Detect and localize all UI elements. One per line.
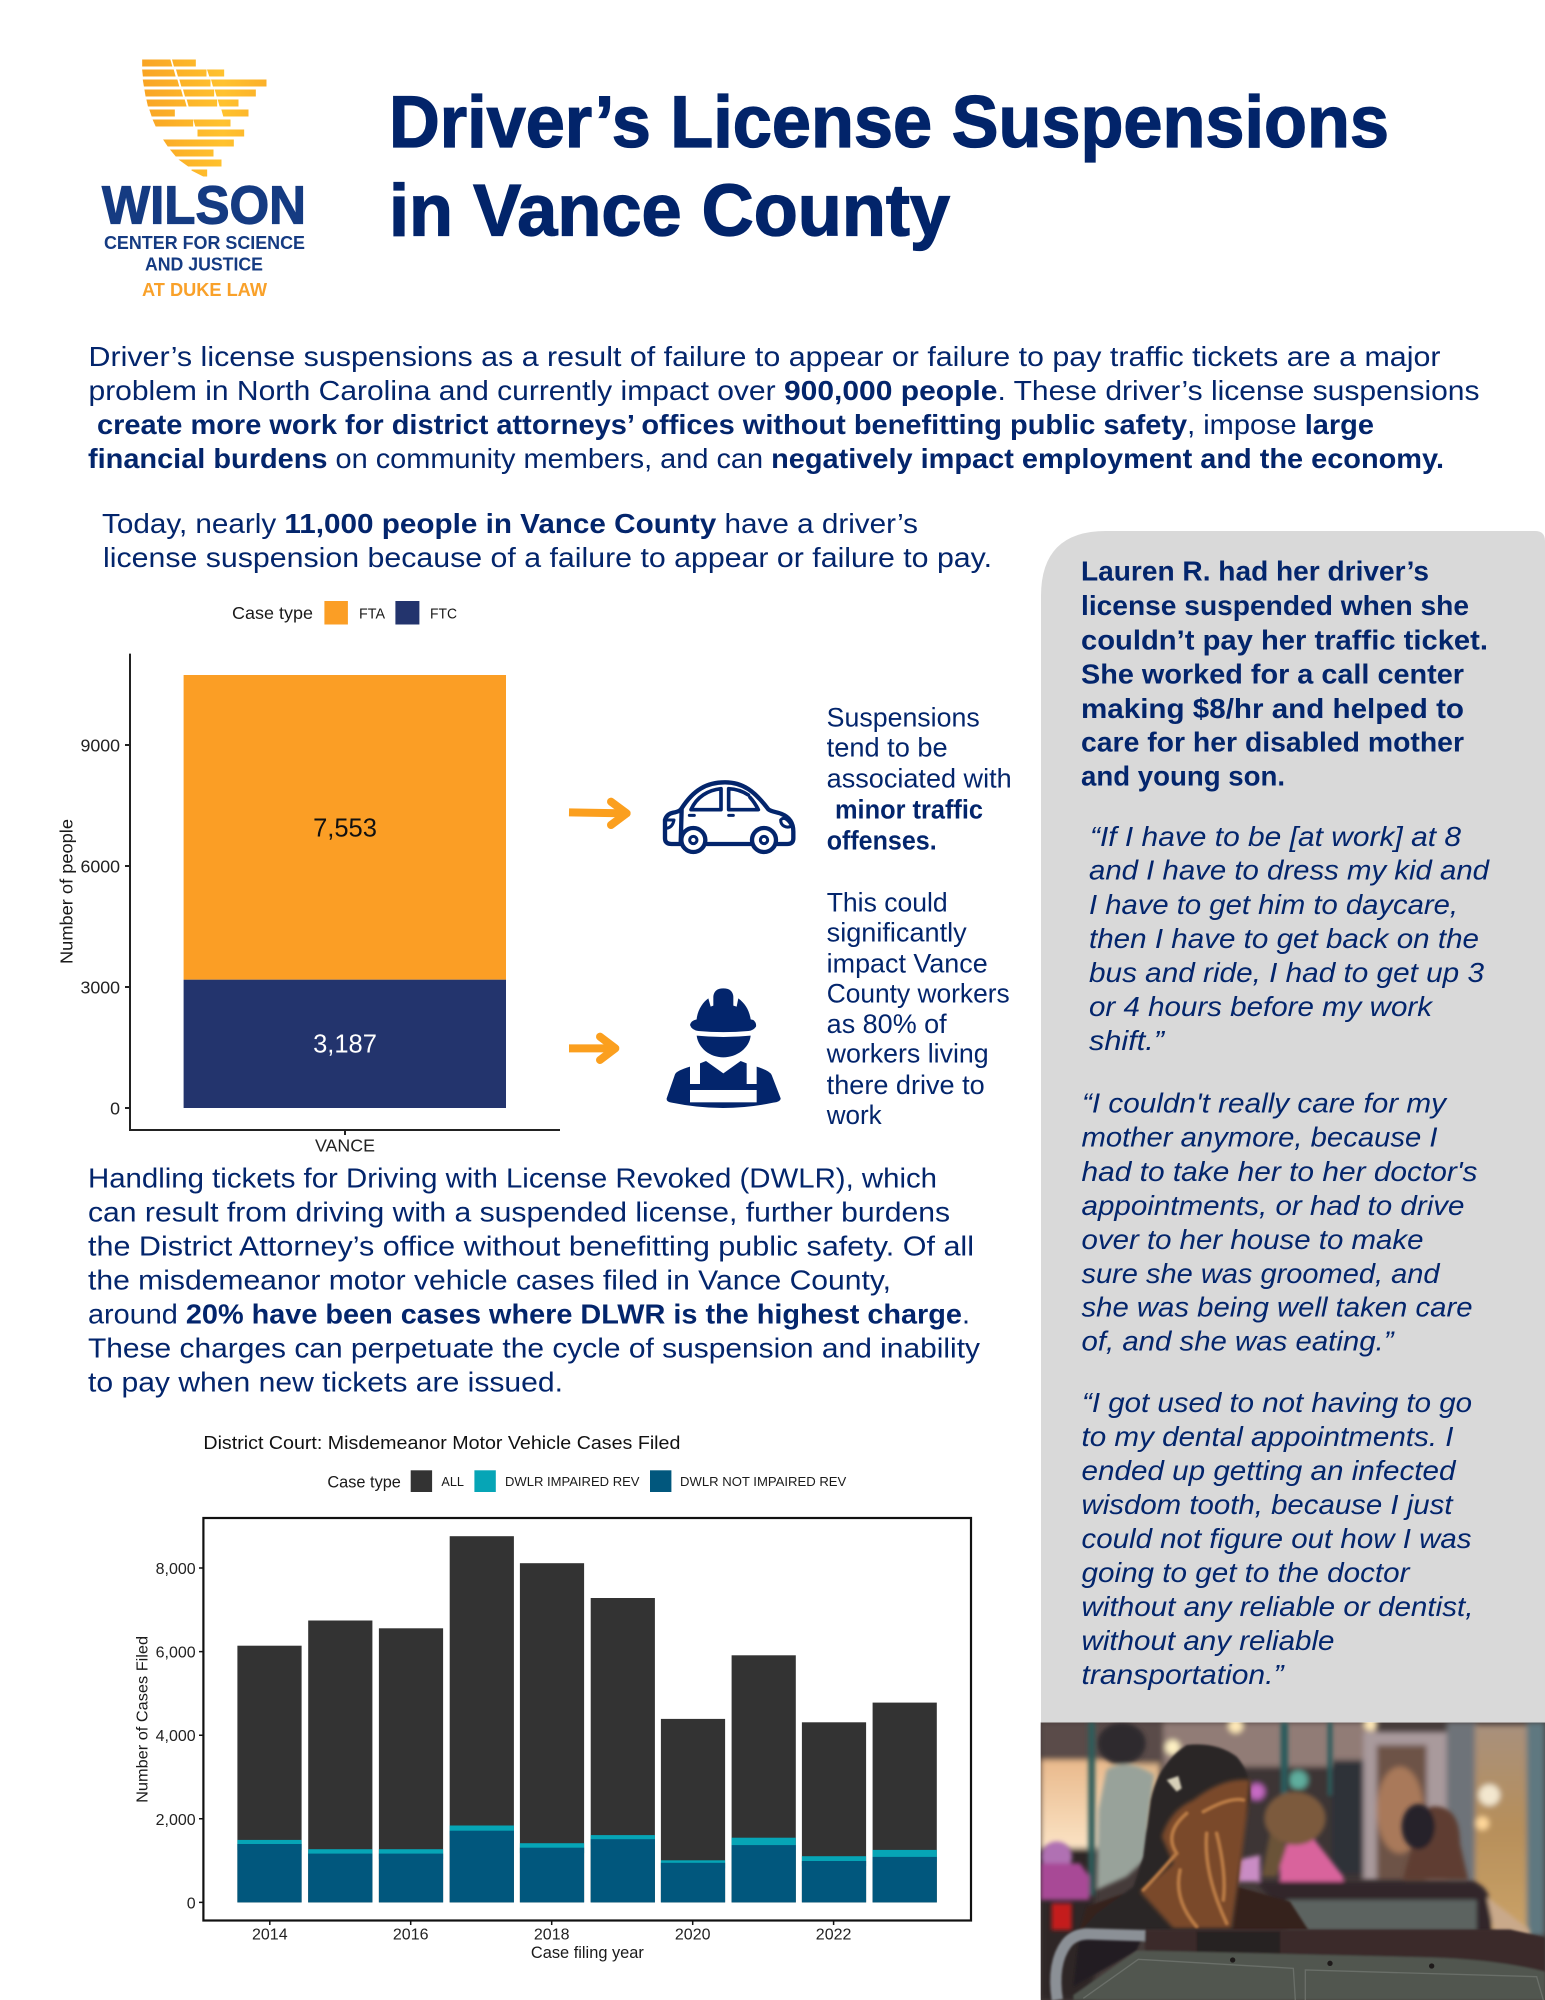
text block: Lauren R. summary: making $8/hr and helped to (1081, 693, 1464, 724)
text block: Lauren R. summary: license suspended when she (1081, 590, 1469, 621)
quote: dental appointments: wisdom tooth, because I just (1082, 1489, 1454, 1520)
text block: Lauren R. summary (1081, 556, 1488, 792)
y axis tick labels: 2,000 (156, 1812, 196, 1829)
x axis tick labels: 2022 (816, 1926, 851, 1943)
quote: caring for mother (1082, 1088, 1478, 1356)
text block: introduction (88, 341, 1480, 474)
quote: caring for mother: mother anymore, because I (1082, 1122, 1438, 1153)
x axis tick labels: 2014 (252, 1926, 288, 1943)
quote: dental appointments: ended up getting an infected (1082, 1455, 1457, 1486)
legend: case type: DWLR IMPAIRED REV (505, 1474, 640, 1489)
title: Driver’s License Suspensions (389, 82, 1389, 163)
bars: DWLR impaired revocation (237, 1826, 937, 1868)
legend: case type: FTA (359, 606, 385, 622)
legend: case type: Case type (232, 603, 313, 623)
text block: minor traffic offenses: minor traffic (835, 795, 983, 825)
text block: DWLR burden: Handling tickets for Driving with License Revoked (DWLR), which (88, 1162, 937, 1194)
text block: workers drive to work: there drive to (827, 1070, 985, 1100)
bars: DWLR not impaired revocation (237, 1831, 937, 1902)
y axis title: Number of people (57, 819, 77, 964)
text block: DWLR burden (88, 1162, 980, 1398)
text block: minor traffic offenses: associated with (827, 763, 1012, 793)
text block: workers drive to work: significantly (827, 918, 967, 948)
photo: woman riding a bus, seen from behind (1041, 1717, 1545, 2000)
quote: dental appointments: transportation.” (1082, 1659, 1285, 1690)
legend: case type: Case type (327, 1472, 401, 1491)
y axis title: Number of Cases Filed (134, 1636, 151, 1803)
y axis tick labels (80, 736, 120, 1118)
x axis tick labels: 2016 (393, 1926, 429, 1943)
quote: getting to work: shift.” (1089, 1025, 1166, 1056)
quote: getting to work: and I have to dress my kid and (1089, 855, 1491, 886)
y axis tick labels: 6000 (80, 856, 120, 876)
y axis tick labels: 4,000 (156, 1728, 196, 1745)
plot frame and ticks (199, 1518, 971, 1925)
y axis tick labels: 0 (187, 1895, 196, 1912)
quote: dental appointments (1082, 1387, 1474, 1690)
x axis label: VANCE (315, 1136, 375, 1156)
text block: workers drive to work: This could (827, 888, 948, 918)
icon: orange striped shield (143, 60, 266, 176)
quote: getting to work: or 4 hours before my work (1089, 991, 1433, 1022)
quote: getting to work: I have to get him to daycare, (1089, 889, 1458, 920)
bar: FTC 3,187: 3,187 (313, 1031, 377, 1059)
panel: Lauren R. story (1041, 531, 1545, 1722)
quote: dental appointments: to my dental appointments. I (1082, 1421, 1454, 1452)
quote: caring for mother: appointments, or had to drive (1082, 1190, 1464, 1221)
bar: FTA 7,553 (184, 675, 506, 980)
y axis tick labels: 9000 (80, 736, 120, 756)
text block: workers drive to work: as 80% of (827, 1009, 947, 1039)
text block: Vance County statistic (102, 508, 992, 573)
quote: dental appointments: “I got used to not having to go (1082, 1387, 1472, 1418)
bar chart: suspensions by case type (57, 601, 560, 1156)
y axis tick labels (156, 1561, 196, 1912)
legend: case type: DWLR NOT IMPAIRED REV (680, 1474, 847, 1489)
x axis tick labels (252, 1926, 851, 1943)
bar: FTC 3,187 (184, 980, 506, 1108)
text block: workers drive to work: impact Vance (827, 949, 988, 979)
chart title: District Court: Misdemeanor Motor Vehicle Cases Filed (203, 1432, 680, 1453)
y axis tick labels: 3000 (80, 978, 120, 998)
text block: DWLR burden: to pay when new tickets are issued. (88, 1366, 563, 1398)
text block: Lauren R. summary: She worked for a call center (1081, 659, 1464, 690)
text block: introduction: Driver’s license suspensions as a result of failure to appear or failure to pay traffic tickets are a major (88, 341, 1440, 372)
text block: introduction: problem in North Carolina and currently impact over 900,000 people . These driver’s license suspensions (88, 375, 1480, 406)
title (389, 82, 1389, 252)
y axis tick labels: 8,000 (156, 1561, 196, 1578)
quote: caring for mother: had to take her to her doctor's (1082, 1156, 1478, 1187)
axes (125, 654, 560, 1135)
text block: workers drive to work (826, 888, 1010, 1130)
text block: DWLR burden: the District Attorney’s office without benefitting public safety. Of all (88, 1230, 974, 1262)
quote: caring for mother: of, and she was eating.” (1082, 1325, 1395, 1356)
bars: all cases (237, 1536, 937, 1902)
quote: dental appointments: without any reliable or dentist, (1082, 1591, 1474, 1622)
quote: caring for mother: over to her house to make (1082, 1224, 1424, 1255)
quote: caring for mother: sure she was groomed, and (1082, 1258, 1441, 1289)
quote: getting to work: then I have to get back on the (1089, 923, 1479, 954)
logo subtitle second line: AND JUSTICE (145, 254, 263, 275)
legend: case type: ALL (441, 1474, 464, 1489)
legend: case type (327, 1470, 847, 1492)
quote: dental appointments: could not figure out how I was (1082, 1523, 1472, 1554)
quote: dental appointments: without any reliable (1082, 1625, 1334, 1656)
icon: car (665, 782, 793, 852)
logo: Wilson Center for Science and Justice (102, 60, 306, 300)
text block: minor traffic offenses (827, 703, 1012, 855)
text block: workers drive to work: work (826, 1100, 882, 1130)
logo affiliation: AT DUKE LAW (142, 279, 268, 300)
legend: case type (232, 601, 457, 624)
y axis tick labels: 0 (110, 1098, 120, 1118)
logo wordmark: WILSON (102, 176, 306, 235)
text block: minor traffic offenses: Suspensions (827, 703, 980, 733)
x axis tick labels: 2018 (534, 1926, 570, 1943)
text block: workers drive to work: County workers (827, 979, 1010, 1009)
arrow: to car (569, 802, 627, 825)
text block: DWLR burden: can result from driving with a suspended license, further burdens (88, 1196, 950, 1228)
text block: minor traffic offenses: tend to be (827, 733, 948, 763)
bar chart: misdemeanor motor vehicle cases filed (134, 1432, 971, 1962)
text block: Lauren R. summary: care for her disabled mother (1081, 727, 1464, 758)
text block: workers drive to work: workers living (826, 1039, 989, 1069)
y axis tick labels: 6,000 (156, 1645, 196, 1662)
quote: caring for mother: “I couldn't really care for my (1082, 1088, 1448, 1119)
text block: DWLR burden: These charges can perpetuate the cycle of suspension and inability (88, 1332, 980, 1364)
text block: minor traffic offenses: offenses. (827, 825, 937, 855)
text block: Vance County statistic: Today, nearly 11,000 people in Vance County have a driver’s (102, 508, 918, 539)
quote: getting to work: bus and ride, I had to get up 3 (1089, 957, 1485, 988)
text block: Vance County statistic: license suspension because of a failure to appear or failure to pay. (103, 542, 992, 573)
x axis tick labels: 2020 (675, 1926, 711, 1943)
quote: getting to work: “If I have to be [at work] at 8 (1090, 821, 1462, 852)
text block: Lauren R. summary: couldn’t pay her traffic ticket. (1081, 625, 1488, 656)
icon: construction worker (667, 988, 781, 1108)
title: in Vance County (389, 170, 950, 252)
quote: caring for mother: she was being well taken care (1082, 1292, 1472, 1323)
text block: introduction: financial burdens on community members, and can negatively impact employment and the economy. (88, 443, 1444, 474)
quote: dental appointments: going to get to the doctor (1082, 1557, 1411, 1588)
x axis title: Case filing year (531, 1944, 644, 1962)
bar: FTA 7,553: 7,553 (313, 814, 377, 842)
logo subtitle: CENTER FOR SCIENCE (104, 232, 305, 253)
text block: Lauren R. summary: and young son. (1081, 761, 1285, 792)
text block: DWLR burden: around 20% have been cases where DLWR is the highest charge . (88, 1298, 970, 1330)
arrow: to worker (569, 1037, 615, 1060)
quote: getting to work (1089, 821, 1491, 1056)
text block: introduction: create more work for district attorneys’ offices without benefitting public safety , impose large (97, 409, 1374, 440)
text block: Lauren R. summary: Lauren R. had her driver’s (1081, 556, 1429, 587)
legend: case type: FTC (430, 606, 457, 622)
text block: DWLR burden: the misdemeanor motor vehicle cases filed in Vance County, (88, 1264, 891, 1296)
